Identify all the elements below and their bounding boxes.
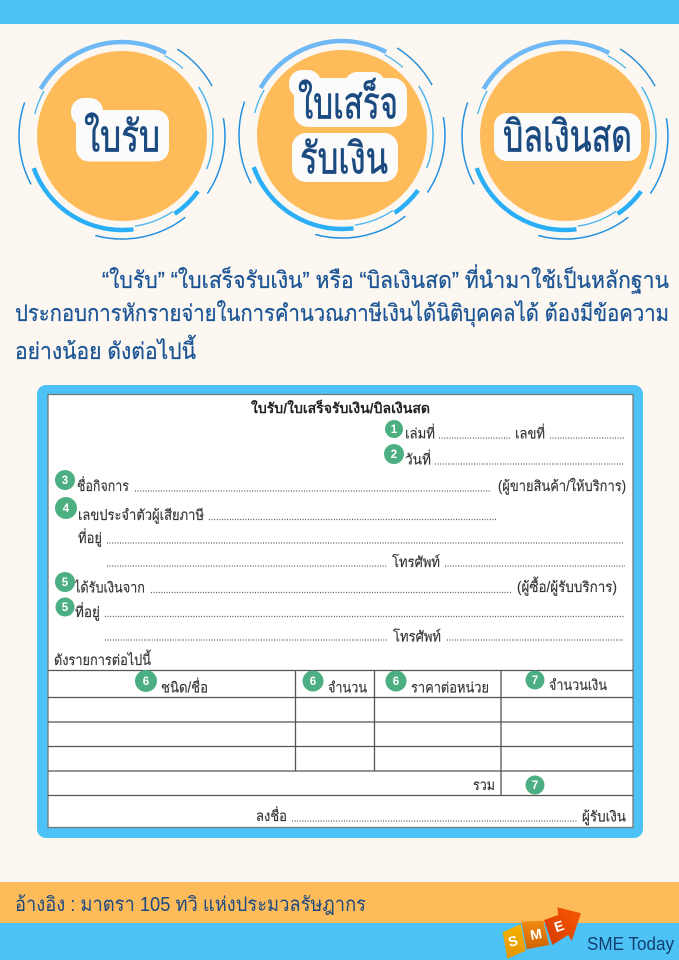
form fields — [54, 424, 626, 669]
badge: บิลเงินสด — [462, 42, 668, 239]
form fields: ที่อยู่ — [78, 528, 102, 547]
number badges: 5 — [62, 577, 69, 589]
reference text: อ้างอิง : มาตรา 105 ทวิ แห่งประมวลรัษฎากร — [15, 894, 366, 916]
number badges: 4 — [63, 503, 70, 515]
form title: ใบรับ/ใบเสร็จรับเงิน/บิลเงินสด — [251, 399, 430, 416]
number badges: 2 — [391, 449, 397, 461]
form fields: ดังรายการต่อไปนี้ — [54, 649, 151, 669]
logo: SME Today — [503, 907, 674, 959]
number badges: 6 — [310, 676, 316, 688]
form fields: เล่มที่ — [405, 424, 435, 442]
badge: ใบเสร็จรับเงิน — [239, 41, 445, 238]
badge: ใบรับ: ใบรับ — [84, 112, 160, 161]
number badges: 7 — [532, 675, 538, 687]
form fields: (ผู้ขายสินค้า/ให้บริการ) — [498, 477, 626, 495]
logo: SME Today: S — [506, 932, 520, 950]
item table — [48, 670, 633, 796]
number badges: 5 — [62, 602, 69, 614]
footer band — [0, 923, 679, 960]
form fields: วันที่ — [405, 450, 431, 468]
form fields: (ผู้ซื้อ/ผู้รับบริการ) — [517, 576, 617, 596]
logo: SME Today: SME Today — [587, 934, 674, 954]
intro paragraph: อย่างน้อย ดังต่อไปนี้ — [15, 335, 196, 364]
number badges: 7 — [532, 780, 538, 792]
signature line — [256, 806, 626, 826]
intro paragraph — [15, 264, 669, 364]
form fields: เลขประจำตัวผู้เสียภาษี — [78, 507, 204, 524]
signature line: ผู้รับเงิน — [582, 808, 626, 826]
number badges: 6 — [393, 676, 399, 688]
item table: รวม — [473, 778, 495, 794]
number badges: 6 — [143, 676, 149, 688]
form fields: ที่อยู่ — [75, 602, 100, 621]
form frame — [37, 385, 643, 838]
form fields: โทรศัพท์ — [392, 553, 440, 571]
item table: จำนวนเงิน — [549, 678, 607, 694]
number badges: 1 — [391, 424, 398, 436]
form fields: ชื่อกิจการ — [77, 476, 129, 495]
item table: ราคาต่อหน่วย — [411, 680, 489, 696]
top banner strip — [0, 0, 679, 24]
form fields: เลขที่ — [515, 424, 545, 442]
number badges: 3 — [62, 475, 68, 487]
badge: ใบเสร็จรับเงิน: รับเงิน — [300, 135, 388, 183]
number badges — [55, 420, 544, 794]
badge: ใบเสร็จรับเงิน: ใบเสร็จ — [298, 78, 398, 128]
badge: บิลเงินสด: บิลเงินสด — [503, 113, 632, 161]
form sheet — [48, 394, 633, 828]
panel: receipt form — [37, 385, 643, 838]
logo: SME Today: E — [552, 917, 566, 935]
badge: ใบรับ — [19, 42, 225, 239]
logo: SME Today: M — [529, 925, 543, 943]
form fields: ได้รับเงินจาก — [73, 578, 145, 596]
reference band — [0, 882, 679, 923]
signature line: ลงชื่อ — [256, 806, 287, 825]
item table: จำนวน — [328, 680, 367, 696]
item table: ชนิด/ชื่อ — [161, 678, 208, 696]
form fields: โทรศัพท์ — [393, 628, 441, 646]
